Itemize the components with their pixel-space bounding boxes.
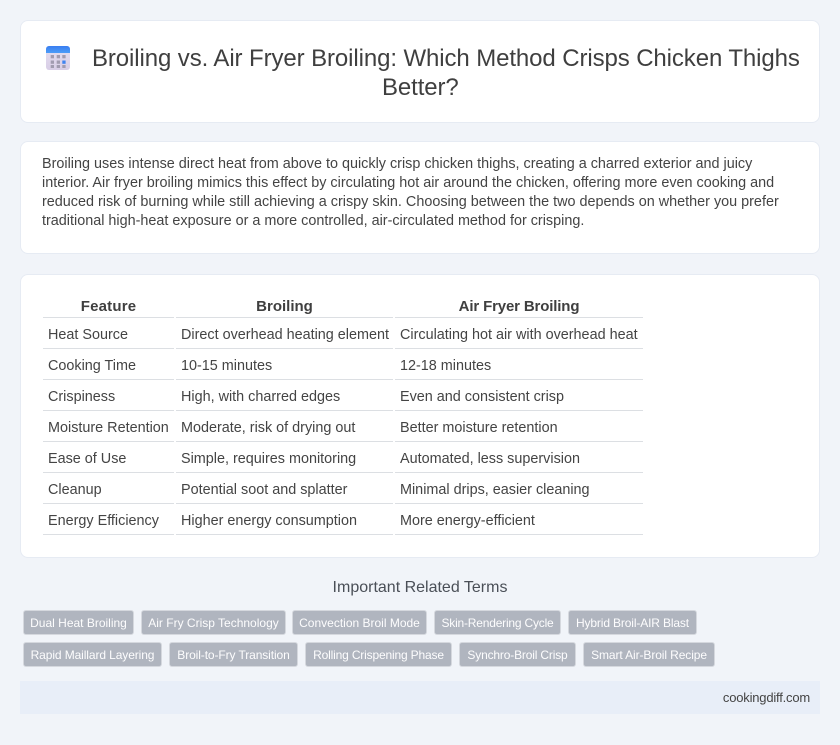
row: cooking time: 12-18 minutes bbox=[400, 358, 491, 374]
tag bbox=[292, 610, 427, 635]
row: cooking time: 10-15 minutes bbox=[181, 358, 272, 374]
row: cooking time bbox=[48, 358, 491, 374]
row: energy efficiency: More energy-efficient bbox=[400, 513, 535, 529]
row: ease of use: Simple, requires monitoring bbox=[181, 451, 356, 467]
row: crispiness: High, with charred edges bbox=[181, 389, 340, 405]
tag: Hybrid Broil-AIR Blast bbox=[576, 616, 689, 630]
tag bbox=[169, 642, 298, 667]
icon: calendar grid bbox=[46, 46, 70, 70]
row: energy efficiency: Higher energy consumption bbox=[181, 513, 357, 529]
tag: Skin-Rendering Cycle bbox=[441, 616, 554, 630]
table header bbox=[81, 298, 579, 315]
row: cleanup bbox=[48, 482, 590, 498]
heading: related terms: Important Related Terms bbox=[333, 579, 507, 596]
row: moisture retention: Moisture Retention bbox=[48, 420, 169, 436]
tag: Broil-to-Fry Transition bbox=[177, 648, 290, 662]
tag: Rolling Crispening Phase bbox=[313, 648, 444, 662]
tag bbox=[459, 642, 576, 667]
row: energy efficiency: Energy Efficiency bbox=[48, 513, 159, 529]
tag: Smart Air-Broil Recipe bbox=[591, 648, 707, 662]
row: ease of use: Automated, less supervision bbox=[400, 451, 580, 467]
row: cleanup: Cleanup bbox=[48, 482, 102, 498]
table header: Feature bbox=[81, 298, 136, 315]
tag: Convection Broil Mode bbox=[299, 616, 420, 630]
footer source text: cookingdiff.com bbox=[723, 690, 810, 705]
table header: Air Fryer Broiling bbox=[459, 298, 579, 315]
row: cleanup: Minimal drips, easier cleaning bbox=[400, 482, 590, 498]
row: heat source: Direct overhead heating element bbox=[181, 327, 389, 343]
row: cooking time: Cooking Time bbox=[48, 358, 136, 374]
row: crispiness: Crispiness bbox=[48, 389, 115, 405]
row: crispiness: Even and consistent crisp bbox=[400, 389, 564, 405]
tag bbox=[23, 610, 134, 635]
row: energy efficiency bbox=[48, 513, 535, 529]
text block: introduction: reduced risk of burning while still achieving a crispy skin. Choosing between the two depends on whether you prefer bbox=[42, 194, 779, 210]
footer bar bbox=[20, 681, 820, 714]
row: moisture retention: Better moisture retention bbox=[400, 420, 558, 436]
tag bbox=[568, 610, 697, 635]
text block: introduction: Broiling uses intense direct heat from above to quickly crisp chicken thighs, creating a charred exterior and juicy bbox=[42, 156, 752, 172]
tag: Dual Heat Broiling bbox=[30, 616, 127, 630]
panel: comparison table bbox=[20, 274, 820, 558]
tag bbox=[583, 642, 715, 667]
row: ease of use: Ease of Use bbox=[48, 451, 126, 467]
tag bbox=[141, 610, 286, 635]
table header: Broiling bbox=[256, 298, 313, 315]
title second line: Better? bbox=[382, 74, 459, 101]
title: Broiling vs. Air Fryer Broiling: Which Method Crisps Chicken Thighs bbox=[92, 45, 800, 72]
tag bbox=[305, 642, 452, 667]
tag: Synchro-Broil Crisp bbox=[467, 648, 568, 662]
row: heat source bbox=[48, 327, 638, 343]
row: heat source: Heat Source bbox=[48, 327, 128, 343]
panel: introduction bbox=[20, 141, 820, 254]
tag: Air Fry Crisp Technology bbox=[148, 616, 279, 630]
tag bbox=[434, 610, 561, 635]
text block: introduction bbox=[42, 156, 779, 229]
row: ease of use bbox=[48, 451, 580, 467]
tag bbox=[23, 642, 162, 667]
text block: introduction: traditional high-heat exposure or a more controlled, air-circulated method for crisping. bbox=[42, 213, 584, 229]
panel: header bbox=[20, 20, 820, 123]
row: cleanup: Potential soot and splatter bbox=[181, 482, 347, 498]
tag: Rapid Maillard Layering bbox=[31, 648, 154, 662]
tag list: related terms bbox=[23, 610, 715, 667]
row: moisture retention bbox=[48, 420, 558, 436]
text block: introduction: interior. Air fryer broiling mimics this effect by circulating hot air around the chicken, offering more even cooking and bbox=[42, 175, 774, 191]
table rules bbox=[43, 317, 643, 535]
row: moisture retention: Moderate, risk of drying out bbox=[181, 420, 355, 436]
row: crispiness bbox=[48, 389, 564, 405]
row: heat source: Circulating hot air with overhead heat bbox=[400, 327, 638, 343]
